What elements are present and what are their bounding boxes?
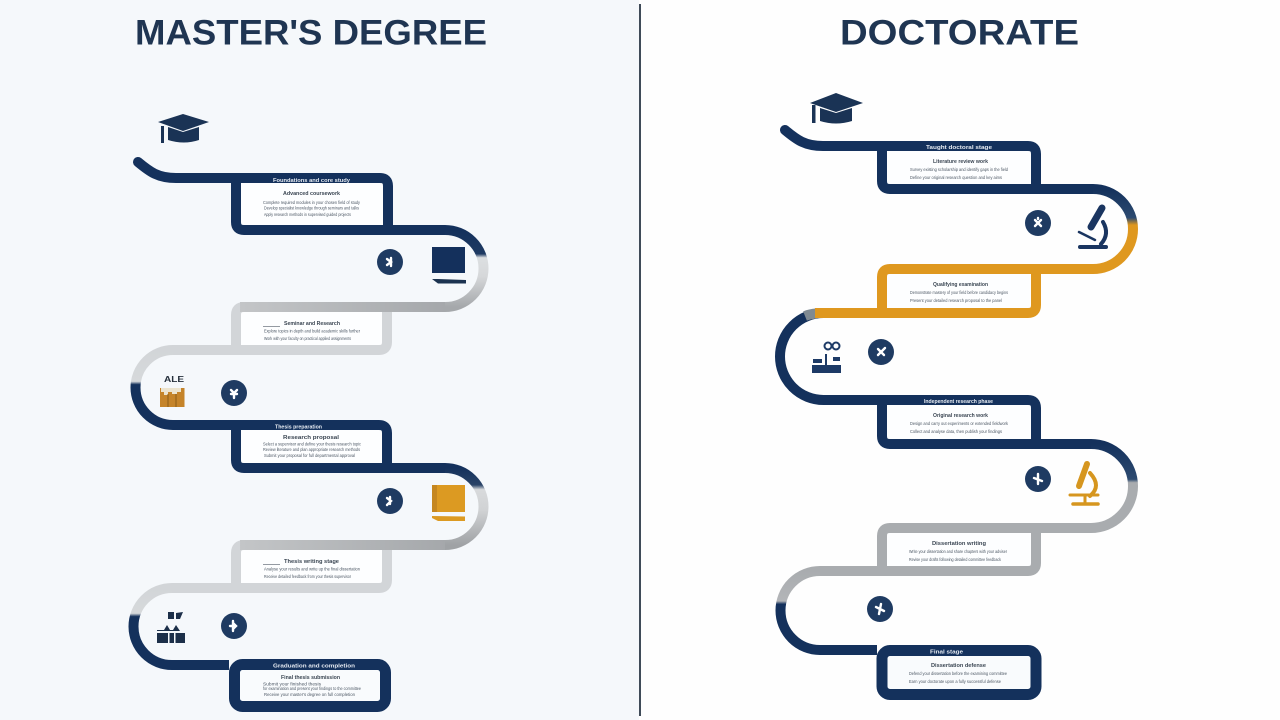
step 2 box: Present your detailed research proposal to the panel — [910, 298, 1002, 303]
step 4 box: Dissertation writing — [932, 541, 986, 547]
step 3 box: Collect and analyse data, then publish your findings — [910, 429, 1003, 434]
step 2 box: Work with your faculty on practical applied assignments — [264, 336, 352, 341]
heading: master's degree: MASTER'S DEGREE — [135, 14, 487, 52]
step 3 box: Research proposal — [283, 435, 340, 441]
step 3 box: Design and carry out experiments or extended fieldwork — [910, 421, 1009, 426]
step 1 box — [785, 130, 1093, 189]
step 5 box: Earn your doctorate upon a fully successful defense — [909, 679, 1001, 684]
step 5 box: Receive your master's degree on full completion — [264, 692, 355, 697]
icon: study desk — [157, 612, 185, 643]
step 2 box: Seminar and Research — [284, 321, 340, 327]
connector curve: step 2 to step 3 — [136, 350, 173, 425]
connector curve: step 3 to step 4 — [1091, 444, 1133, 528]
step 1 box: Foundations and core study — [273, 178, 350, 184]
connector curve: step 1 to step 2 — [1093, 189, 1133, 269]
step 4 box: Revise your drafts following detailed committee feedback — [909, 557, 1002, 562]
doctorate pathway — [780, 130, 1133, 694]
step 5 box: Dissertation defense — [931, 663, 986, 669]
step marker: doctorate 3 — [1025, 466, 1051, 492]
step 5 box: Final stage — [930, 650, 963, 656]
step 1 box: Literature review work — [933, 159, 988, 165]
step 3 box — [823, 399, 1091, 444]
panel: doctorate background — [641, 0, 1280, 720]
step marker: doctorate 1 — [1025, 210, 1051, 236]
step 2 box — [815, 269, 1093, 313]
step marker: doctorate 2 — [868, 339, 894, 365]
step 2 box: Explore topics in depth and build academic skills further — [264, 328, 360, 334]
step 3 box: Review literature and plan appropriate research methods — [263, 447, 361, 452]
step 1 box: Complete required modules in your chosen field of study — [263, 200, 361, 205]
step 1 box — [138, 162, 445, 230]
step 4 box: Write your dissertation and share chapters with your adviser — [909, 549, 1007, 554]
step marker: master's 1 — [377, 249, 403, 275]
step 2 box: Demonstrate mastery of your field before candidacy begins — [910, 290, 1009, 295]
step 4 box: Receive detailed feedback from your thesis supervisor — [264, 574, 351, 579]
panel: master's degree background — [0, 0, 639, 720]
step 2 box: Qualifying examination — [933, 282, 988, 288]
step 3 box: Submit your proposal for full departmental approval — [264, 453, 355, 458]
step 5 box: Graduation and completion — [273, 664, 355, 670]
step 5 box — [172, 664, 386, 707]
step 3 box: Independent research phase — [924, 399, 993, 405]
step 1 box: Advanced coursework — [283, 191, 340, 197]
icon: graduation cap (doctorate) — [810, 93, 863, 124]
step 1 box: Survey existing scholarship and identify gaps in the field — [910, 167, 1008, 172]
step 1 box: Define your original research question and key aims — [910, 175, 1003, 180]
step 4 box — [820, 528, 1091, 571]
master's degree pathway — [134, 162, 484, 707]
step 1 box: Apply research methods in supervised guided projects — [264, 212, 352, 217]
step 3 box: Original research work — [933, 413, 988, 419]
step marker: master's 3 — [377, 488, 403, 514]
connector curve: step 1 to step 2 — [445, 230, 484, 307]
step 5 box: Defend your dissertation before the examining committee — [909, 671, 1007, 676]
icon: gold box with label — [160, 375, 185, 407]
step 5 box: Submit your finished thesis — [263, 682, 322, 686]
step marker: doctorate 4 — [867, 596, 893, 622]
center divider — [639, 4, 641, 716]
icon: gold microscope — [1070, 464, 1098, 504]
icon: gold box with label: ALE — [164, 375, 185, 384]
step 5 box — [820, 650, 1036, 694]
step 3 box: Select a supervisor and define your thesis research topic — [263, 442, 362, 446]
step 5 box: for examination and present your findings to the committee — [263, 686, 361, 691]
step 4 box: Analyse your results and write up the final dissertation — [264, 566, 360, 572]
step 2 box — [173, 307, 445, 350]
step 4 box — [172, 545, 445, 588]
step 5 box: Final thesis submission — [281, 675, 340, 681]
step 1 box: Taught doctoral stage — [926, 145, 992, 151]
icon: navy microscope — [1079, 208, 1106, 247]
connector curve: step 3 to step 4 — [445, 468, 484, 545]
step 3 box — [173, 424, 445, 468]
step marker: master's 4 — [221, 613, 247, 639]
step 4 box: Thesis writing stage — [284, 559, 339, 565]
step marker: master's 2 — [221, 380, 247, 406]
connector curve: step 2 to step 3 — [780, 313, 824, 400]
heading: doctorate: DOCTORATE — [840, 14, 1079, 52]
icon: graduation cap (master's) — [158, 114, 209, 143]
icon: lab bench — [812, 342, 841, 373]
icon: gold book — [432, 485, 465, 521]
icon: navy book — [432, 247, 466, 284]
connector curve: step 4 to step 5 — [134, 588, 172, 665]
step 1 box: Develop specialist knowledge through seminars and talks — [264, 206, 360, 210]
connector curve: step 4 to step 5 — [781, 571, 820, 650]
step 3 box: Thesis preparation — [275, 424, 322, 430]
